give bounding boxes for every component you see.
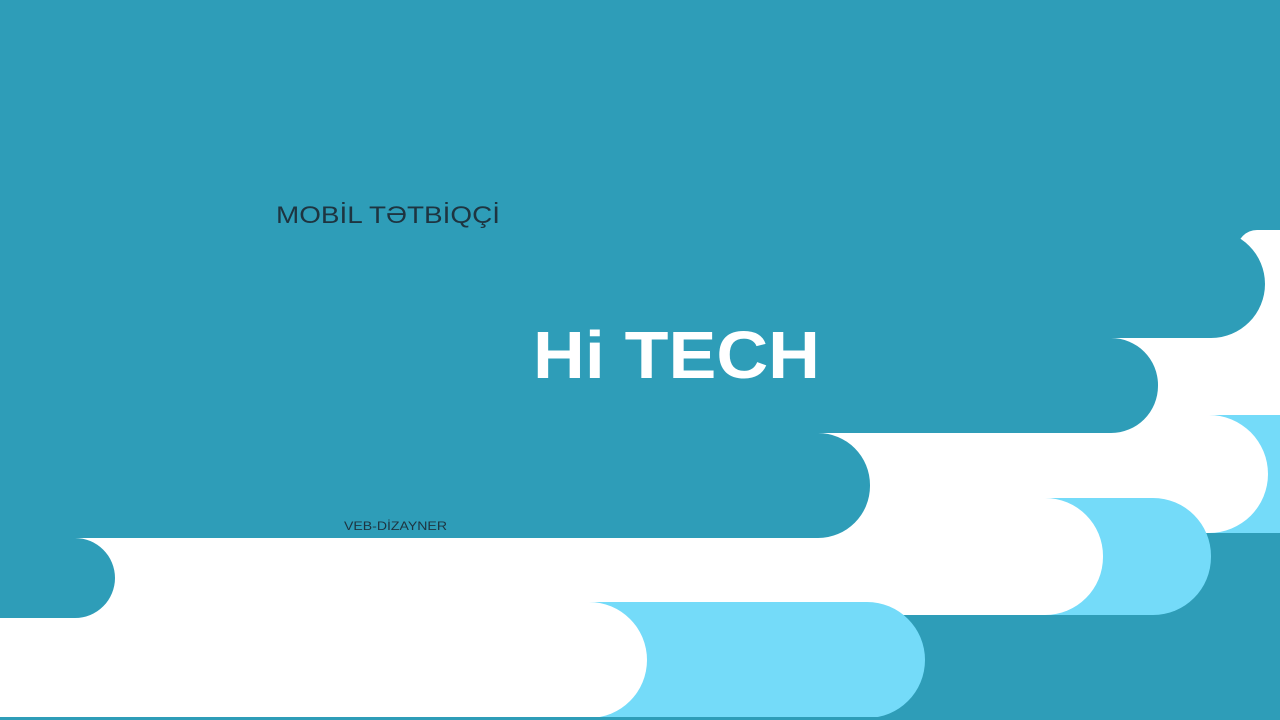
- teal pill row 2: [0, 338, 1158, 433]
- bottom strip: [0, 717, 1280, 720]
- white pill row 3: [700, 415, 1268, 533]
- teal pill left: [0, 538, 115, 618]
- subtitle: web designer: VEB-DİZAYNER: [344, 519, 447, 533]
- light blue pill row 5: [400, 602, 925, 718]
- light blue pill row 4: [700, 498, 1211, 615]
- white band top right: [1100, 230, 1280, 420]
- white pill row 5: [0, 602, 647, 718]
- teal pill row 1: [0, 230, 1265, 338]
- title: Hi TECH: [533, 318, 820, 393]
- light blue pill row 3: [900, 415, 1280, 533]
- subtitle: mobile app: MOBİL TƏTBİQÇİ: [276, 202, 500, 229]
- teal pill row 3: [0, 433, 870, 538]
- white pill row 4: [0, 498, 1103, 615]
